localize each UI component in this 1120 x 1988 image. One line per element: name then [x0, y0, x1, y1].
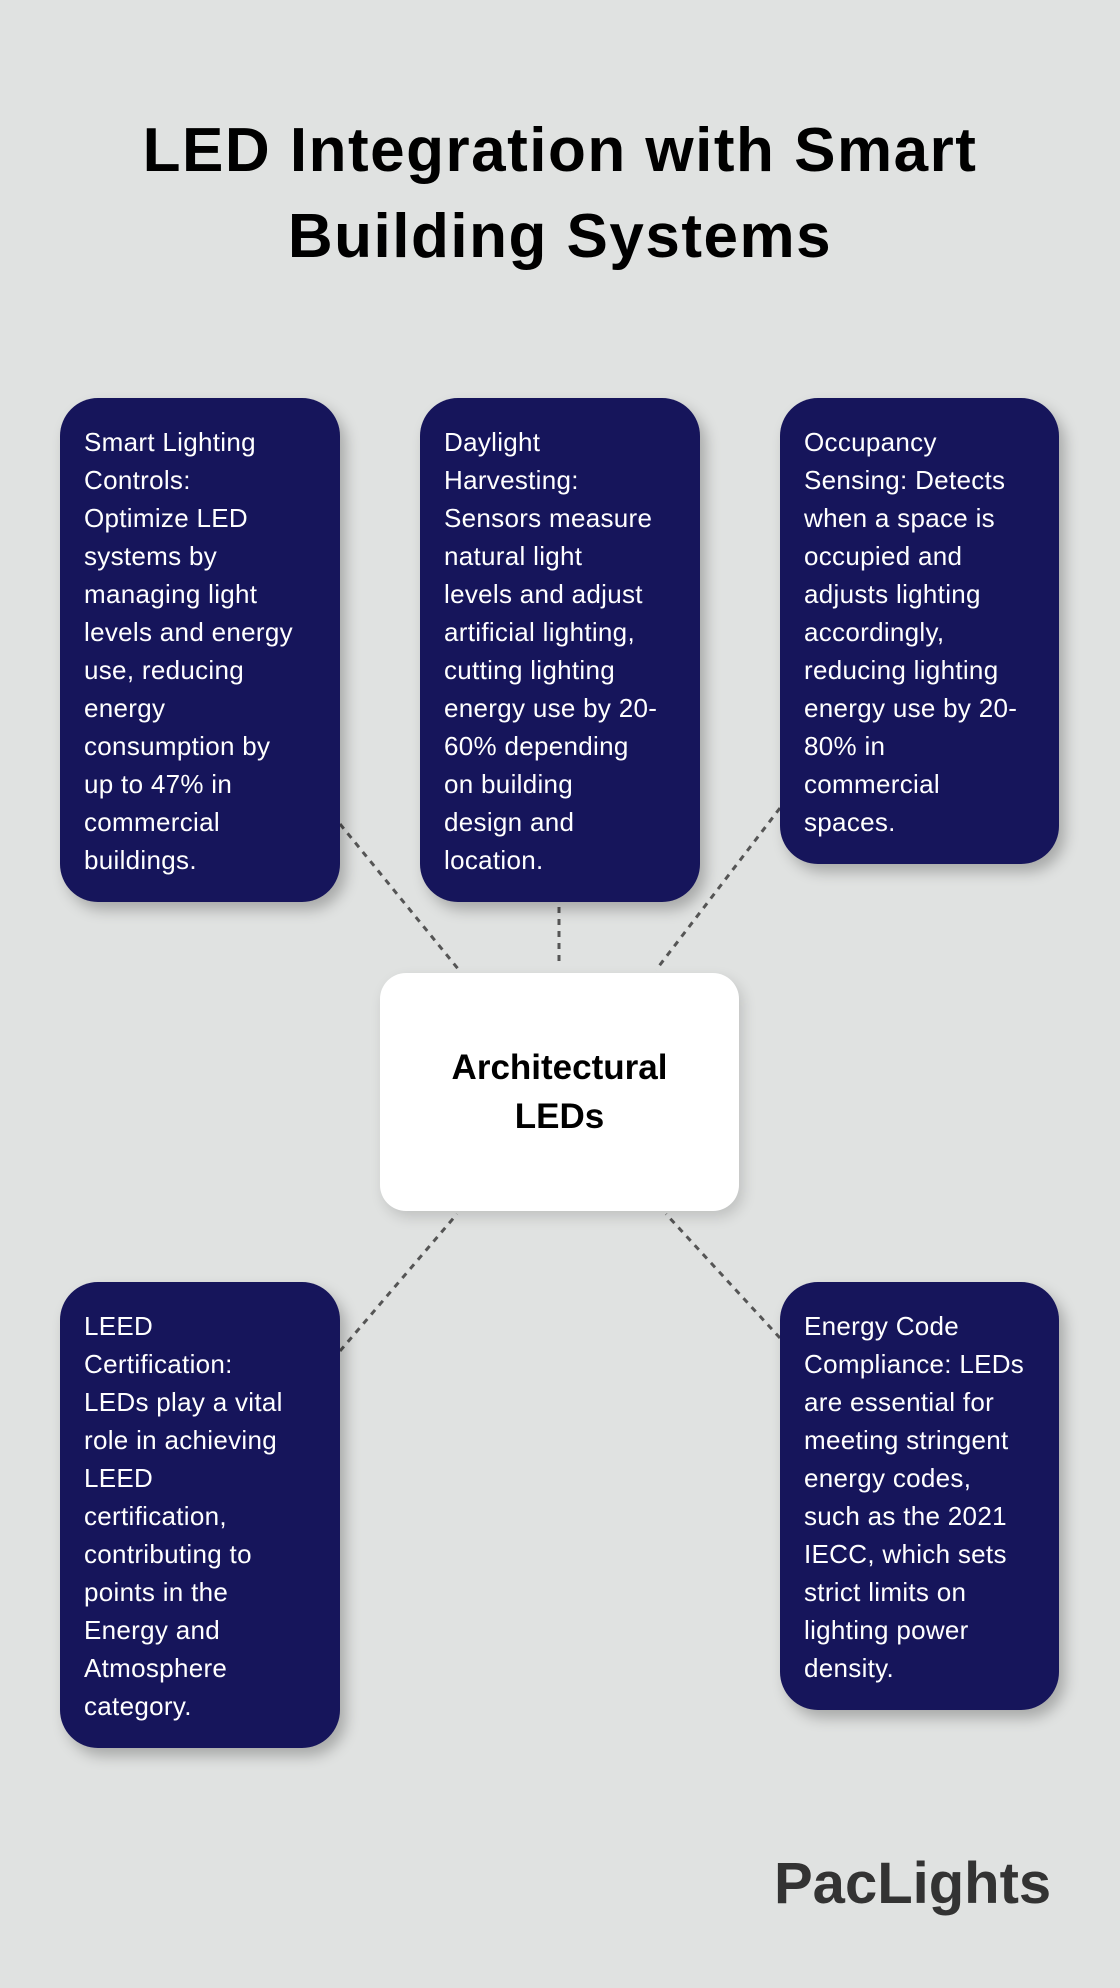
panel: smart lighting controls: consumption by	[84, 731, 270, 761]
panel: smart lighting controls: Controls:	[84, 465, 191, 495]
panel: daylight harvesting: design and	[444, 807, 574, 837]
panel: smart lighting controls: managing light	[84, 579, 257, 609]
title: Building Systems	[288, 202, 832, 271]
panel: LEED certification: LEED	[84, 1311, 153, 1341]
panel: smart lighting controls: buildings.	[84, 845, 197, 875]
panel: smart lighting controls: energy	[84, 693, 165, 723]
panel: daylight harvesting: location.	[444, 845, 544, 875]
panel: occupancy sensing: 80% in	[804, 731, 885, 761]
panel: LEED certification: Atmosphere	[84, 1653, 227, 1683]
panel: smart lighting controls: use, reducing	[84, 655, 244, 685]
panel: LEED certification: certification,	[84, 1501, 227, 1531]
panel: daylight harvesting	[420, 398, 700, 902]
panel: smart lighting controls: commercial	[84, 807, 220, 837]
panel: LEED certification: Energy and	[84, 1615, 220, 1645]
panel: energy code compliance: such as the 2021	[804, 1501, 1007, 1531]
panel: smart lighting controls: up to 47% in	[84, 769, 232, 799]
panel: daylight harvesting: 60% depending	[444, 731, 629, 761]
panel: smart lighting controls: Smart Lighting	[84, 427, 256, 457]
panel: daylight harvesting: Harvesting:	[444, 465, 579, 495]
panel: energy code compliance: density.	[804, 1653, 894, 1683]
panel: occupancy sensing: Sensing: Detects	[804, 465, 1005, 495]
panel: daylight harvesting: levels and adjust	[444, 579, 643, 609]
center node: Architectural	[452, 1048, 667, 1087]
panel: LEED certification: LEED	[84, 1463, 153, 1493]
panel: daylight harvesting: Daylight	[444, 427, 540, 457]
panel: daylight harvesting: Sensors measure	[444, 503, 652, 533]
center node	[380, 973, 739, 1211]
panel: LEED certification: LEDs play a vital	[84, 1387, 283, 1417]
panel: daylight harvesting: natural light	[444, 541, 582, 571]
logo: PacLights	[774, 1851, 1051, 1916]
panel: occupancy sensing: when a space is	[804, 503, 995, 533]
panel: energy code compliance: meeting stringent	[804, 1425, 1009, 1455]
panel: occupancy sensing: energy use by 20-	[804, 693, 1017, 723]
panel: LEED certification: contributing to	[84, 1539, 252, 1569]
panel: energy code compliance: lighting power	[804, 1615, 969, 1645]
panel: smart lighting controls	[60, 398, 340, 902]
panel: energy code compliance: are essential for	[804, 1387, 994, 1417]
panel: energy code compliance: Compliance: LEDs	[804, 1349, 1024, 1379]
center node: LEDs	[515, 1097, 604, 1136]
panel: smart lighting controls: Optimize LED	[84, 503, 248, 533]
panel: daylight harvesting: energy use by 20-	[444, 693, 657, 723]
panel: LEED certification: role in achieving	[84, 1425, 277, 1455]
panel: smart lighting controls: systems by	[84, 541, 217, 571]
panel: LEED certification: points in the	[84, 1577, 228, 1607]
title	[143, 116, 977, 271]
title: LED Integration with Smart	[143, 116, 977, 185]
panel: energy code compliance: Energy Code	[804, 1311, 959, 1341]
panel: LEED certification: Certification:	[84, 1349, 233, 1379]
panel: occupancy sensing	[780, 398, 1059, 864]
panel: energy code compliance: strict limits on	[804, 1577, 966, 1607]
panel: occupancy sensing: occupied and	[804, 541, 962, 571]
panel: occupancy sensing: accordingly,	[804, 617, 944, 647]
panel: smart lighting controls: levels and energy	[84, 617, 293, 647]
panel: energy code compliance: IECC, which sets	[804, 1539, 1007, 1569]
panel: daylight harvesting: on building	[444, 769, 573, 799]
panel: occupancy sensing: reducing lighting	[804, 655, 998, 685]
panel: occupancy sensing: Occupancy	[804, 427, 937, 457]
panel: daylight harvesting: artificial lighting,	[444, 617, 635, 647]
panel: energy code compliance: energy codes,	[804, 1463, 971, 1493]
panel: daylight harvesting: cutting lighting	[444, 655, 615, 685]
panel: LEED certification: category.	[84, 1691, 192, 1721]
panel: energy code compliance	[780, 1282, 1059, 1710]
panel: LEED certification	[60, 1282, 340, 1748]
panel: occupancy sensing: spaces.	[804, 807, 896, 837]
panel: occupancy sensing: adjusts lighting	[804, 579, 981, 609]
panel: occupancy sensing: commercial	[804, 769, 940, 799]
